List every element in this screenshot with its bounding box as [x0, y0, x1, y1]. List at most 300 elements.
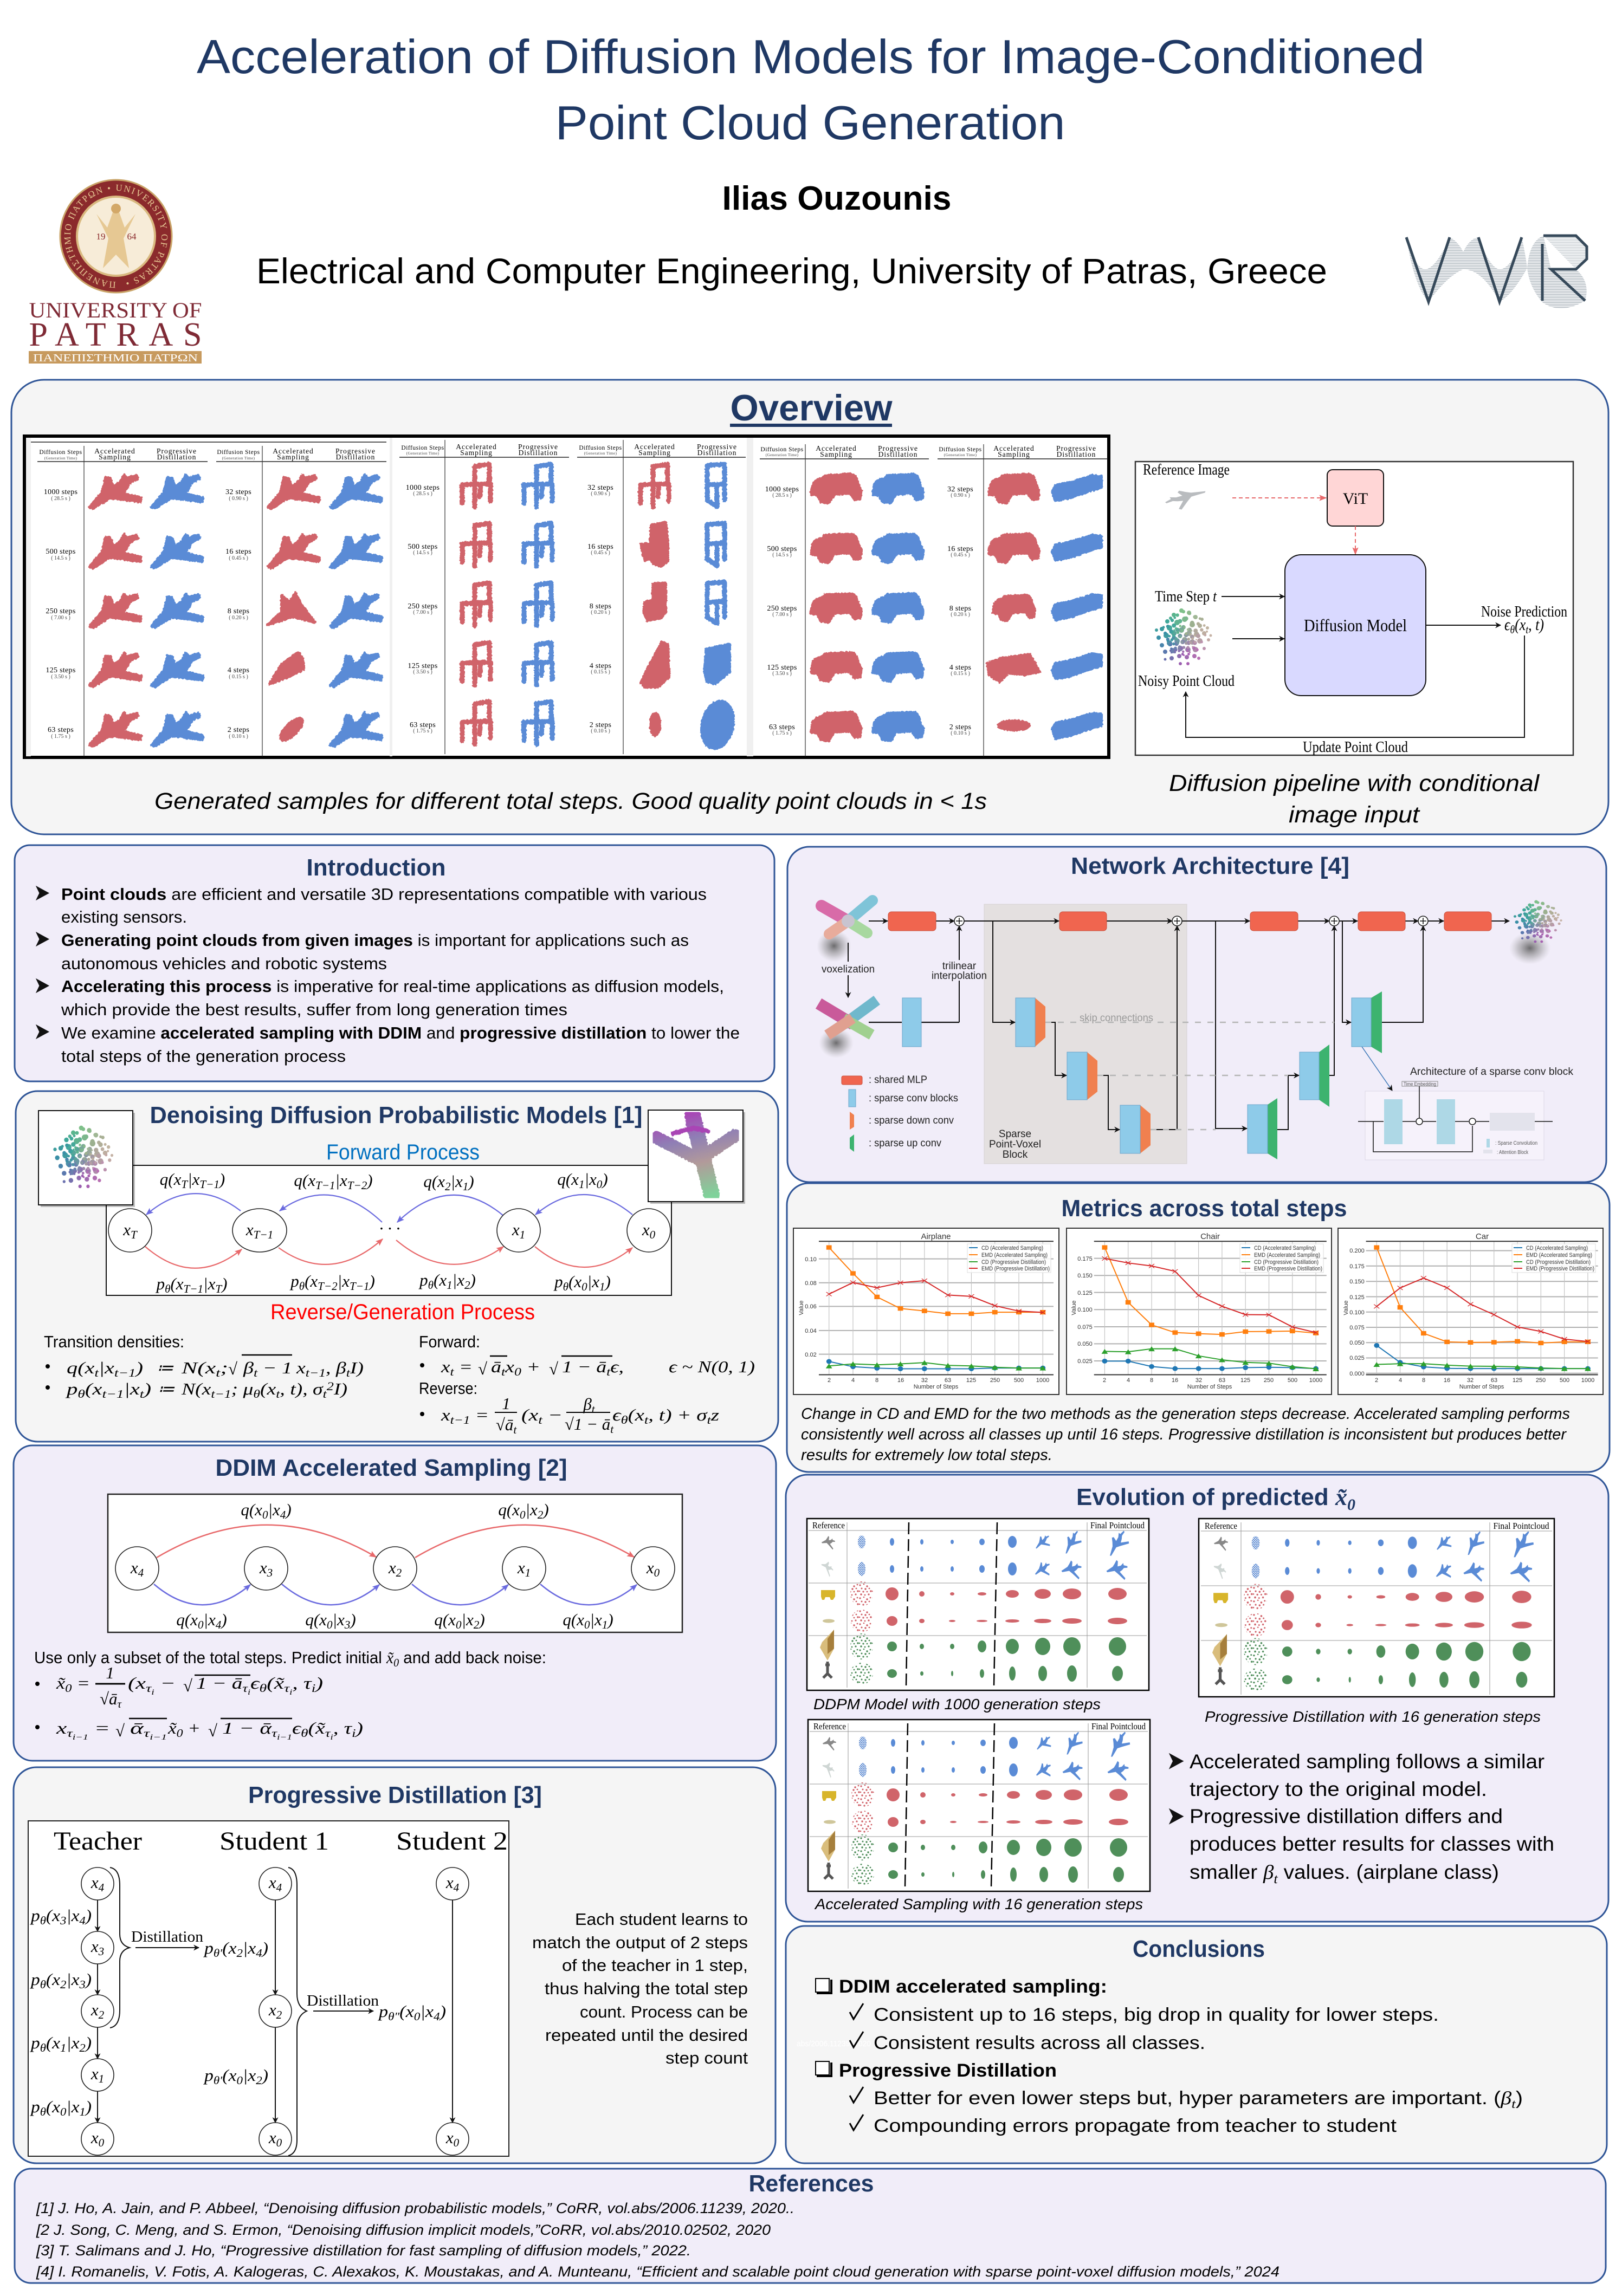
diagram: forward and reverse chain: q(xT|xT−1)	[160, 1170, 225, 1191]
equations: forward and reverse	[419, 1332, 755, 1436]
inset: sparse conv block architecture	[1358, 1047, 1574, 1160]
text and equations: √	[208, 1721, 217, 1740]
title: Point Cloud Generation	[555, 96, 1065, 150]
text and equations: √āτ	[100, 1689, 122, 1710]
text and equations: x̃0 +	[167, 1718, 201, 1740]
Diffusion Model block	[1285, 555, 1426, 696]
step labels: 1000 steps	[406, 484, 440, 492]
legend: CD (Progressive Distillation)	[1254, 1259, 1319, 1266]
chart: Airplane: 500	[1014, 1377, 1024, 1384]
caption: generated samples: Generated samples for different total steps. Good quality point clouds in < 1s	[154, 788, 987, 814]
chart: Airplane: 4	[851, 1377, 855, 1384]
chart: Car: Value	[1343, 1300, 1349, 1315]
text and equations	[34, 1648, 546, 1742]
equations: transition densities: pθ(x t−1 |x t)	[65, 1379, 151, 1400]
text: evolution findings: trajectory to the original model.	[1190, 1778, 1487, 1800]
equations: forward and reverse: √	[478, 1359, 487, 1378]
equations: transition densities: √	[228, 1359, 237, 1378]
diagram: teacher and students: x2	[268, 2000, 282, 2021]
legend: CD (Accelerated Sampling)	[1254, 1245, 1316, 1251]
equations: forward and reverse: √1 − āt	[565, 1415, 614, 1436]
step labels: ( 0.20 s )	[591, 609, 610, 615]
table headers: Diffusion Steps	[939, 446, 982, 453]
diagram: diffusion pipeline: Noisy Point Cloud	[1138, 673, 1235, 690]
chart: Car: 8	[1422, 1377, 1425, 1384]
chart: Chair: 0.050	[1077, 1341, 1093, 1347]
diagram: forward and reverse chain: q(x1|x0)	[557, 1170, 608, 1191]
legend	[967, 1244, 1051, 1273]
chart: Car: Car	[1476, 1232, 1489, 1241]
inset: sparse conv block architecture: Time Embedding	[1404, 1081, 1436, 1087]
step labels: 32 steps	[225, 488, 251, 496]
label: Reverse/Generation Process: Reverse/Generation Process	[270, 1300, 535, 1324]
chart: Airplane: 0.08	[805, 1280, 817, 1287]
equations: forward and reverse: 1	[502, 1394, 510, 1413]
panel: DDIM	[14, 1445, 776, 1761]
diagram: forward and reverse chain: xT−1	[245, 1220, 273, 1241]
diagram: teacher and students: Teacher	[54, 1827, 142, 1856]
chart: Car: Number of Steps	[1459, 1384, 1504, 1390]
legend: : sparse up conv	[869, 1138, 941, 1149]
diagram: teacher and students: x0	[91, 2128, 105, 2149]
ViT block	[1327, 470, 1384, 526]
heading: Metrics across total steps: Metrics across total steps	[1061, 1195, 1347, 1222]
table headers: Diffusion Steps	[579, 445, 622, 451]
chart: Car: 2	[1375, 1377, 1378, 1384]
step labels: 63 steps	[410, 721, 436, 729]
car samples	[811, 475, 1101, 741]
table headers: Sampling	[460, 449, 493, 457]
reference list: [3] T. Salimans and J. Ho, “Progressive distillation for fast sampling of diffusion models,” 2022.	[36, 2242, 691, 2259]
table headers: Diffusion Steps	[217, 449, 260, 456]
text and equations: 1	[106, 1663, 114, 1682]
diagram: diffusion pipeline	[1135, 462, 1573, 756]
table headers: Distillation	[697, 449, 736, 457]
diagram: forward and reverse chain: pθ(x1|x2)	[418, 1270, 476, 1292]
sparse conv and up conv blocks	[1248, 991, 1382, 1159]
figure: progressive distillation evolution: Final Pointcloud	[1494, 1521, 1549, 1531]
bullet list: Point clouds are efficient and versatile 3D representations compatible with various	[61, 885, 707, 904]
diagram: forward and reverse chain: pθ(xT−2|xT−1)	[289, 1272, 375, 1293]
chart: Chair: 4	[1127, 1377, 1130, 1384]
diagram: teacher and students: Distillation	[131, 1929, 203, 1945]
label: Forward Process: Forward Process	[326, 1140, 480, 1164]
text and equations: x τi−1 =	[56, 1718, 110, 1742]
legend: CD (Accelerated Sampling)	[1526, 1245, 1588, 1251]
logo: University of Patras	[29, 179, 202, 364]
panel: introduction	[15, 845, 774, 1081]
logo: University of Patras: ΠΑΝΕΠΙΣΤΗΜΙΟ ΠΑΤΡΩΝ • UNIVERSITY OF PATRAS •	[64, 184, 168, 288]
chart: Chair: Number of Steps	[1187, 1384, 1232, 1390]
main connections: skip connections	[1080, 1013, 1153, 1024]
diagram: DDIM chain: q(x0|x1)	[563, 1610, 613, 1631]
step labels: 16 steps	[587, 543, 613, 551]
diagram: teacher and students: pθ(x1|x2)	[30, 2033, 92, 2054]
text and equations: √	[115, 1721, 125, 1740]
chart: Chair: 63	[1219, 1377, 1225, 1384]
diagram: DDIM chain: q(x0|x2)	[434, 1610, 485, 1631]
step labels: ( 28.5 s )	[772, 492, 792, 498]
step labels: ( 0.45 s )	[951, 552, 970, 558]
step labels: 2 steps	[590, 721, 611, 729]
chart: Chair: 32	[1196, 1377, 1202, 1384]
chart: Chair: 125	[1240, 1377, 1250, 1384]
panel: network architecture	[787, 847, 1606, 1182]
table headers: Sampling	[638, 449, 671, 457]
chart: Car: 0.175	[1349, 1263, 1365, 1270]
equations: forward and reverse: βt	[583, 1395, 596, 1416]
chart: Airplane: 8	[875, 1377, 878, 1384]
panel: conclusions	[786, 1926, 1607, 2163]
step labels: ( 0.90 s )	[951, 492, 970, 498]
diagram: forward and reverse chain: q(xT−1|xT−2)	[294, 1171, 373, 1192]
chart: Car: 16	[1444, 1377, 1450, 1384]
text: explanation: step count	[665, 2048, 748, 2067]
chart: Car: 125	[1513, 1377, 1522, 1384]
step labels: ( 0.10 s )	[591, 728, 610, 734]
figure: generated samples table	[24, 436, 1109, 757]
chart: Airplane: Value	[798, 1300, 805, 1315]
chart: Chair: 0.125	[1077, 1290, 1093, 1296]
diagram: forward and reverse chain: x1	[512, 1220, 525, 1241]
text and equations: (x τi −	[128, 1674, 176, 1697]
legend: : shared MLP	[869, 1074, 927, 1086]
diagram: diffusion pipeline: Reference Image	[1143, 462, 1230, 478]
diagram: teacher and students: x4	[445, 1873, 460, 1894]
diagram: DDIM chain: q(x0|x4)	[241, 1500, 292, 1521]
caption: DDPM: DDPM Model with 1000 generation steps	[813, 1696, 1101, 1713]
table headers: Distillation	[336, 453, 375, 461]
conclusions: DDIM	[816, 1976, 1439, 2053]
bullet list: which provide the best results, suffer from long generation times	[61, 1000, 567, 1019]
diagram: DDIM chain: x1	[517, 1558, 531, 1579]
step labels: ( 0.45 s )	[591, 550, 610, 556]
equations: transition densities: Transition densities:	[44, 1332, 184, 1351]
table headers: Diffusion Steps	[39, 449, 82, 456]
legend: CD (Progressive Distillation)	[981, 1259, 1046, 1266]
diagram: forward and reverse chain	[106, 1165, 671, 1295]
chart: Airplane: Number of Steps	[914, 1384, 959, 1390]
table headers: Diffusion Steps	[401, 445, 444, 451]
diagram: teacher and students: pθ′(x2|x4)	[203, 1938, 268, 1960]
chart: Car: 4	[1399, 1377, 1402, 1384]
legend: EMD (Accelerated Sampling)	[1254, 1252, 1320, 1259]
text: evolution findings: smaller βt values. (airplane class)	[1190, 1861, 1499, 1886]
ViT block: ViT	[1343, 490, 1368, 508]
conclusions: DDIM: Consistent results across all classes.	[874, 2033, 1205, 2053]
equations: transition densities: N(x t−1; μ θ(xt, t), σ t2I)	[181, 1379, 347, 1400]
legend: : sparse down conv	[869, 1115, 954, 1126]
heading: Overview: Overview	[731, 387, 893, 429]
equations: transition densities: ≔	[158, 1379, 175, 1398]
step labels: ( 7.00 s )	[51, 615, 70, 621]
table headers: Accelerated	[456, 443, 497, 451]
gray sparse point-voxel block: Sparse	[999, 1128, 1031, 1140]
step labels: 2 steps	[949, 723, 971, 731]
diagram: teacher and students: Student 1	[219, 1827, 329, 1856]
diagram: teacher and students: x4	[268, 1873, 282, 1894]
text and equations: 1 − ᾱ τi−1	[222, 1718, 292, 1742]
step labels: 250 steps	[46, 607, 76, 615]
table headers: Distillation	[519, 449, 558, 457]
step labels: 1000 steps	[765, 485, 799, 494]
image: noisy point cloud	[38, 1111, 135, 1207]
panel: evolution of predicted x0	[786, 1475, 1608, 1922]
chart: Airplane: Airplane	[921, 1232, 951, 1241]
diagram: DDIM chain: q(x0|x2)	[498, 1500, 549, 1521]
panel: references	[15, 2169, 1606, 2283]
title: Acceleration of Diffusion Models for Image-Conditioned	[197, 30, 1425, 83]
step labels: 125 steps	[46, 666, 76, 674]
bullet list: Accelerating this process is imperative for real-time applications as diffusion models,	[61, 977, 724, 996]
equations: forward and reverse: xt =	[441, 1357, 473, 1378]
step labels: 4 steps	[949, 664, 971, 672]
chart: Airplane: 0.02	[805, 1352, 817, 1358]
equations: forward and reverse: ϵ ~ N(0, 1)	[669, 1357, 755, 1376]
caption: metrics: Change in CD and EMD for the two methods as the generation steps decrease. Accelerated sampling performs	[801, 1405, 1570, 1423]
chart: Chair: 500	[1288, 1377, 1297, 1384]
time step input: Time Step t	[1155, 588, 1217, 605]
equations: forward and reverse: ātx0 +	[491, 1357, 540, 1378]
chart: Airplane: 16	[897, 1377, 904, 1384]
equations: transition densities: N(x t;	[181, 1358, 228, 1379]
conclusions: progressive distillation	[816, 2060, 1523, 2136]
chart: Chair: 250	[1264, 1377, 1274, 1384]
step labels: 500 steps	[408, 543, 438, 551]
reference list	[36, 2200, 1279, 2280]
diagram: forward and reverse chain: pθ(x0|x1)	[553, 1272, 611, 1293]
logo: University of Patras: PATRAS	[29, 316, 202, 353]
icon: noisy point cloud	[1155, 608, 1212, 665]
chart: Airplane: 32	[921, 1377, 928, 1384]
table headers: (Generation Time)	[406, 451, 440, 456]
step labels: ( 0.20 s )	[951, 612, 970, 618]
step labels: 2 steps	[228, 726, 249, 734]
chart: Car: 1000	[1581, 1377, 1594, 1384]
step labels: 8 steps	[949, 605, 971, 613]
chart: Car: 0.075	[1349, 1325, 1365, 1331]
caption: accelerated sampling: Accelerated Sampling with 16 generation steps	[814, 1896, 1143, 1912]
diagram: forward and reverse chain: · · ·	[379, 1219, 400, 1238]
diagram: DDIM chain: x3	[259, 1558, 273, 1579]
legend	[1240, 1244, 1323, 1273]
figure: progressive distillation evolution	[1199, 1519, 1554, 1697]
chart: Airplane: 1000	[1036, 1377, 1049, 1384]
chart: Car: 0.050	[1349, 1340, 1365, 1346]
text: evolution findings: produces better results for classes with	[1190, 1833, 1554, 1855]
icon: reference airplane	[1163, 484, 1206, 511]
step labels: ( 14.5 s )	[772, 552, 792, 558]
table headers: (Generation Time)	[944, 452, 977, 457]
table headers: Progressive	[157, 447, 197, 455]
chart: Chair: 0.100	[1077, 1307, 1093, 1313]
diagram: teacher and students: x0	[268, 2128, 282, 2149]
icon: input point cloud	[817, 900, 873, 962]
bullet list: Generating point clouds from given images is important for applications such as	[61, 931, 689, 950]
Diffusion Model block: Diffusion Model	[1304, 615, 1407, 635]
trilinear interpolation arrow	[932, 926, 987, 1022]
diagram: teacher and students: x4	[91, 1873, 105, 1894]
table headers	[39, 443, 1096, 461]
table headers: Accelerated	[273, 447, 314, 455]
conclusions: DDIM: DDIM accelerated sampling:	[839, 1976, 1107, 1997]
step labels: ( 7.00 s )	[413, 609, 432, 615]
heading: DDIM Accelerated Sampling: DDIM Accelerated Sampling [2]	[216, 1455, 567, 1481]
diagram: teacher and students: x2	[91, 2000, 105, 2021]
diagram: teacher and students: Student 2	[396, 1827, 508, 1856]
equations: forward and reverse: √	[549, 1359, 558, 1378]
voxelization arrow: voxelization	[822, 964, 875, 975]
step labels: 4 steps	[590, 662, 611, 670]
step labels: ( 28.5 s )	[51, 496, 70, 502]
step labels	[44, 484, 973, 740]
table headers: Distillation	[878, 450, 917, 458]
equations: transition densities: q(x t|x t−1 )	[67, 1358, 143, 1379]
table headers: Sampling	[277, 453, 309, 461]
table headers: Sampling	[998, 450, 1030, 458]
chart: Airplane	[793, 1228, 1059, 1395]
step labels: 8 steps	[590, 602, 611, 611]
conclusions: DDIM: Consistent up to 16 steps, big drop in quality for lower steps.	[874, 2005, 1439, 2025]
caption: metrics	[801, 1405, 1570, 1464]
table headers: (Generation Time)	[222, 456, 255, 461]
diagram: forward and reverse chain: pθ(xT−1|xT)	[156, 1274, 227, 1295]
equations: forward and reverse: Forward:	[419, 1332, 480, 1351]
table headers: Progressive	[697, 443, 737, 451]
reference list: [4] I. Romanelis, V. Fotis, A. Kalogeras, C. Alexakos, K. Moustakas, and A. Munteanu, “Efficient and scalable point cloud generation with sparse point-voxel diffusion models,” 2024	[36, 2263, 1279, 2280]
bullet list: existing sensors.	[61, 907, 187, 926]
diagram: forward and reverse chain: xT	[122, 1220, 138, 1241]
table headers: (Generation Time)	[766, 452, 799, 457]
figure: DDPM evolution	[807, 1519, 1149, 1690]
chart: Chair: 8	[1150, 1377, 1153, 1384]
equations: forward and reverse: √āt	[496, 1415, 517, 1436]
diagram: diffusion pipeline: ϵθ(xt, t)	[1504, 615, 1544, 636]
bullet list: total steps of the generation process	[61, 1047, 346, 1066]
step labels: ( 0.45 s )	[229, 555, 248, 561]
chair samples	[462, 464, 738, 751]
step labels: ( 0.90 s )	[229, 496, 248, 502]
legend	[842, 1074, 958, 1152]
legend: EMD (Accelerated Sampling)	[1526, 1252, 1592, 1259]
legend: CD (Progressive Distillation)	[1526, 1259, 1591, 1266]
step labels: ( 0.20 s )	[229, 615, 248, 621]
text and equations: x̃0 =	[56, 1674, 90, 1695]
inset: sparse conv block architecture: : Sparse Convolution	[1495, 1140, 1537, 1146]
diagram: DDIM chain: q(x0|x4)	[176, 1610, 227, 1631]
table headers: Progressive	[878, 444, 918, 452]
reference list: [2 J. Song, C. Meng, and S. Ermon, “Denoising diffusion implicit models,”CoRR, vol.abs/2010.02502, 2020	[36, 2222, 771, 2238]
chart: Chair: 0.150	[1077, 1273, 1093, 1279]
step labels: ( 0.10 s )	[229, 734, 248, 740]
chart: Car: 63	[1491, 1377, 1497, 1384]
step labels: 32 steps	[587, 484, 613, 492]
panel: progressive distillation	[14, 1767, 776, 2163]
table headers: Sampling	[820, 450, 852, 458]
table headers: Sampling	[99, 453, 131, 461]
heading: Introduction: Introduction	[307, 854, 445, 881]
step labels: ( 0.90 s )	[591, 491, 610, 497]
logo: University of Patras: ΠΑΝΕΠΙΣΤΗΜΙΟ ΠΑΤΡΩΝ	[33, 352, 198, 364]
chart: Car: 0.025	[1349, 1355, 1365, 1361]
table headers: Accelerated	[94, 447, 135, 455]
diagram: diffusion pipeline: Noise Prediction	[1481, 604, 1567, 620]
step labels: 250 steps	[408, 602, 438, 611]
step labels: ( 14.5 s )	[51, 555, 70, 561]
voxelization arrow	[822, 943, 875, 997]
diagram: diffusion pipeline: Update Point Cloud	[1303, 739, 1408, 756]
table headers: Accelerated	[993, 444, 1035, 452]
text: evolution findings	[1169, 1750, 1554, 1886]
chart: Car: 0.200	[1349, 1248, 1365, 1254]
legend: EMD (Progressive Distillation)	[981, 1266, 1050, 1272]
inset: sparse conv block architecture: : Attention Block	[1497, 1150, 1529, 1156]
step labels: ( 0.15 s )	[591, 669, 610, 675]
step labels: ( 3.50 s )	[413, 669, 432, 675]
heading: Progressive Distillation: Progressive Distillation [3]	[248, 1782, 542, 1808]
figure: accelerated sampling evolution	[808, 1720, 1150, 1891]
step labels: ( 0.15 s )	[229, 674, 248, 680]
step labels: 1000 steps	[44, 488, 77, 496]
chart: Airplane: 0.04	[805, 1328, 817, 1334]
equations: transition densities	[44, 1332, 364, 1400]
table headers: Progressive	[518, 443, 558, 451]
heading: References: References	[749, 2170, 874, 2197]
chart: Chair: Chair	[1200, 1232, 1220, 1241]
diagram: DDIM chain: x2	[388, 1558, 402, 1579]
text: explanation: repeated until the desired	[545, 2026, 748, 2045]
chart: Car: 250	[1536, 1377, 1546, 1384]
legend	[1512, 1244, 1595, 1273]
trilinear interpolation arrow: interpolation	[932, 970, 987, 982]
conclusions: progressive distillation: Progressive Distillation	[839, 2060, 1057, 2081]
icon: output point cloud	[1509, 900, 1562, 964]
chart: Chair: 0.075	[1077, 1324, 1093, 1331]
gray sparse point-voxel block: Block	[1003, 1149, 1028, 1160]
chart: Car: 0.100	[1349, 1309, 1365, 1316]
legend: CD (Accelerated Sampling)	[981, 1245, 1043, 1251]
diagram: teacher and students: pθ′(x0|x2)	[203, 2066, 268, 2087]
equations: transition densities: βt − 1	[243, 1358, 292, 1379]
text: explanation: of the teacher in 1 step,	[562, 1956, 748, 1975]
table headers: Distillation	[157, 453, 196, 461]
title	[197, 30, 1425, 150]
caption: diffusion pipeline: image input	[1289, 802, 1420, 828]
heading: Evolution of predicted x0: Evolution of predicted x̃0	[1076, 1484, 1355, 1514]
gray sparse point-voxel block	[984, 904, 1187, 1164]
diagram: teacher and students: pθ″(x0|x4)	[378, 2002, 446, 2023]
step labels: ( 0.10 s )	[951, 730, 970, 736]
chart: Car: 0.125	[1349, 1294, 1365, 1301]
panel: metrics	[787, 1183, 1610, 1472]
chart: Chair: Value	[1071, 1300, 1077, 1315]
step labels: 4 steps	[228, 666, 249, 674]
step labels: ( 3.50 s )	[772, 671, 792, 677]
equations: forward and reverse: 1 − ā tϵ,	[562, 1357, 624, 1378]
step labels: 16 steps	[947, 545, 973, 553]
figure: accelerated sampling evolution: Reference	[813, 1721, 846, 1731]
equations: forward and reverse: Reverse:	[419, 1379, 477, 1398]
legend: EMD (Progressive Distillation)	[1254, 1266, 1322, 1272]
text: explanation	[532, 1910, 748, 2067]
chart: Airplane: 2	[828, 1377, 831, 1384]
step labels: 8 steps	[228, 607, 249, 615]
diagram: DDIM chain: q(x0|x3)	[305, 1610, 356, 1631]
author name: Ilias Ouzounis	[722, 180, 952, 217]
table headers: Progressive	[335, 447, 376, 455]
chart: Chair: 0.025	[1077, 1358, 1093, 1365]
step labels: 63 steps	[769, 723, 795, 731]
